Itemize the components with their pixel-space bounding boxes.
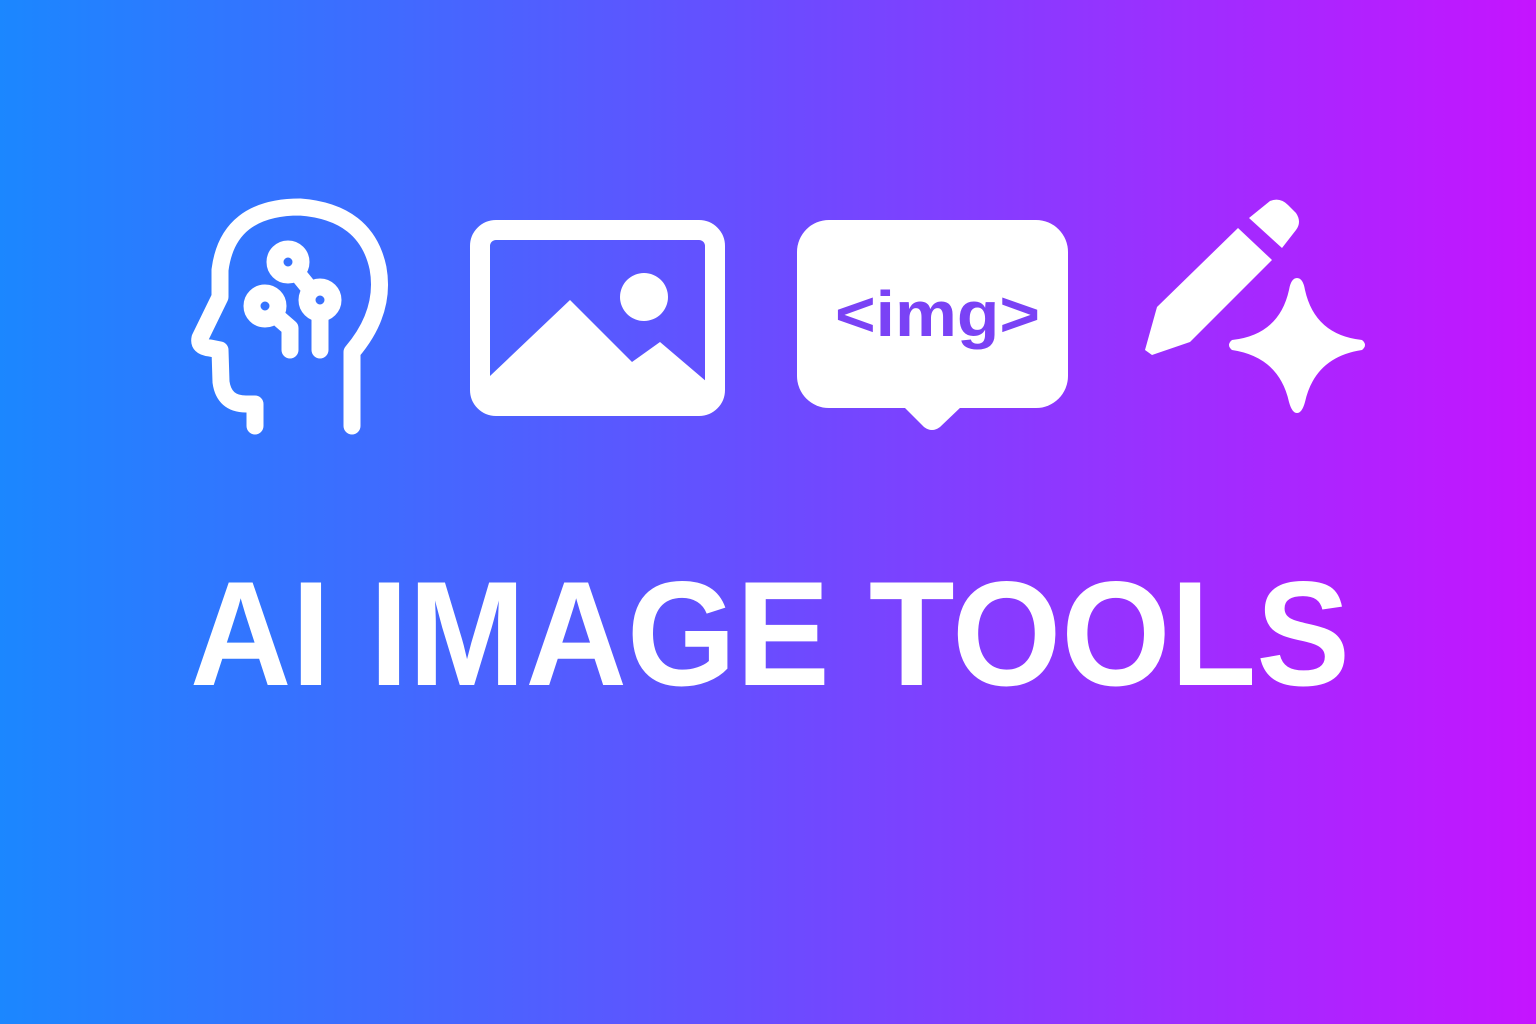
icon: pencil and sparkle	[1145, 200, 1365, 413]
icon: img speech bubble	[797, 220, 1068, 430]
icon: picture frame	[480, 230, 715, 406]
icon: AI head	[200, 207, 380, 426]
title: AI IMAGE TOOLS	[190, 550, 1350, 717]
icon: img speech bubble: <img>	[835, 278, 1040, 350]
